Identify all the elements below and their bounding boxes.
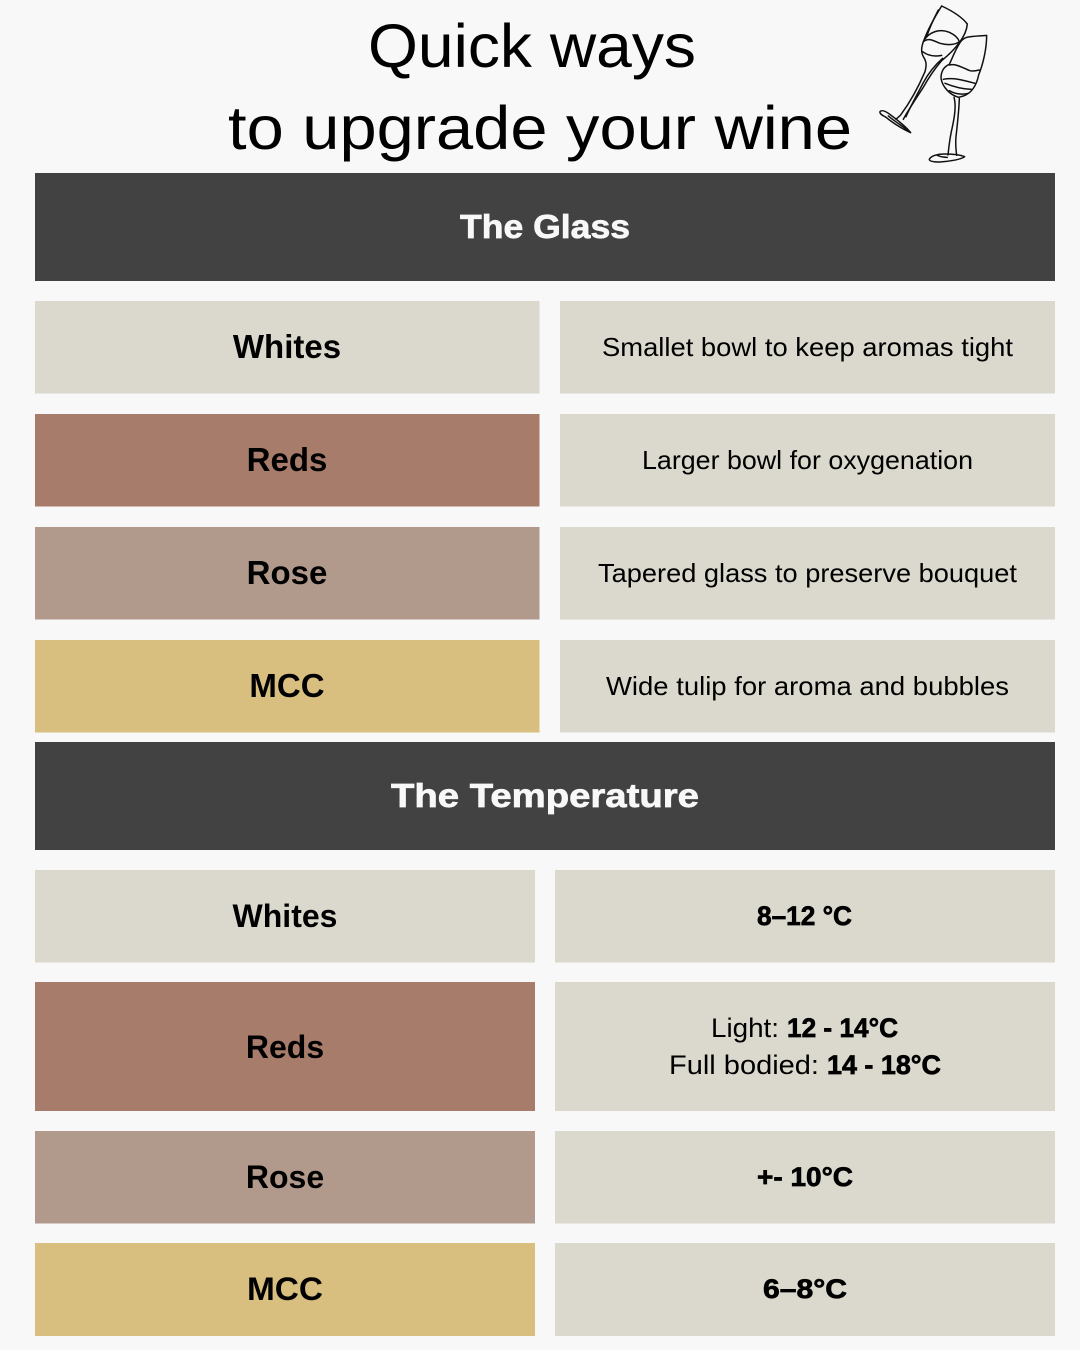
row: temperature reds value: 14 - 18°C — [827, 1050, 941, 1080]
row: glass mcc label — [35, 640, 540, 732]
row: glass whites description — [560, 301, 1055, 394]
row: glass rose label — [35, 527, 540, 620]
row: glass mcc description — [560, 640, 1055, 732]
title — [228, 12, 852, 162]
row: glass whites label: Whites — [233, 328, 341, 365]
row: glass reds label — [35, 414, 540, 506]
row: temperature mcc label — [35, 1243, 535, 1336]
row: temperature reds label: Reds — [246, 1029, 324, 1065]
row: glass reds description — [560, 414, 1055, 506]
row: glass rose label: Rose — [247, 554, 327, 591]
row: temperature mcc value — [555, 1243, 1055, 1336]
row: temperature rose label — [35, 1131, 535, 1224]
icon: clinking wine glasses — [880, 6, 987, 162]
row: temperature reds value: Light: — [711, 1013, 779, 1043]
row: temperature reds value — [555, 982, 1055, 1111]
row: temperature mcc label: MCC — [247, 1271, 323, 1307]
row: temperature rose value: +- 10°C — [757, 1162, 853, 1192]
panel: the temperature header: The Temperature — [391, 777, 699, 814]
row: glass reds label: Reds — [247, 441, 327, 478]
row: glass mcc description: Wide tulip for aroma and bubbles — [606, 671, 1009, 701]
row: temperature rose label: Rose — [246, 1159, 324, 1195]
title: Quick ways — [368, 12, 696, 80]
row: temperature reds value: 12 - 14°C — [787, 1013, 898, 1043]
row: glass rose description: Tapered glass to preserve bouquet — [598, 558, 1018, 588]
panel: the glass header: The Glass — [460, 208, 630, 245]
row: temperature whites label — [35, 870, 535, 962]
row: glass whites description: Smallet bowl to keep aromas tight — [602, 332, 1014, 362]
row: temperature rose value — [555, 1131, 1055, 1224]
panel: the glass header — [35, 173, 1055, 281]
panel: the temperature header — [35, 742, 1055, 850]
row: glass rose description — [560, 527, 1055, 620]
row: glass mcc label: MCC — [249, 667, 325, 704]
row: temperature mcc value: 6–8°C — [763, 1274, 847, 1304]
row: temperature reds value: Full bodied: — [669, 1050, 819, 1080]
row: temperature whites value: 8–12 °C — [757, 901, 852, 931]
row: glass whites label — [35, 301, 540, 394]
row: temperature reds label — [35, 982, 535, 1111]
row: temperature whites label: Whites — [233, 898, 337, 934]
row: temperature whites value — [555, 870, 1055, 962]
title: to upgrade your wine — [228, 94, 852, 162]
row: glass reds description: Larger bowl for oxygenation — [642, 445, 973, 475]
